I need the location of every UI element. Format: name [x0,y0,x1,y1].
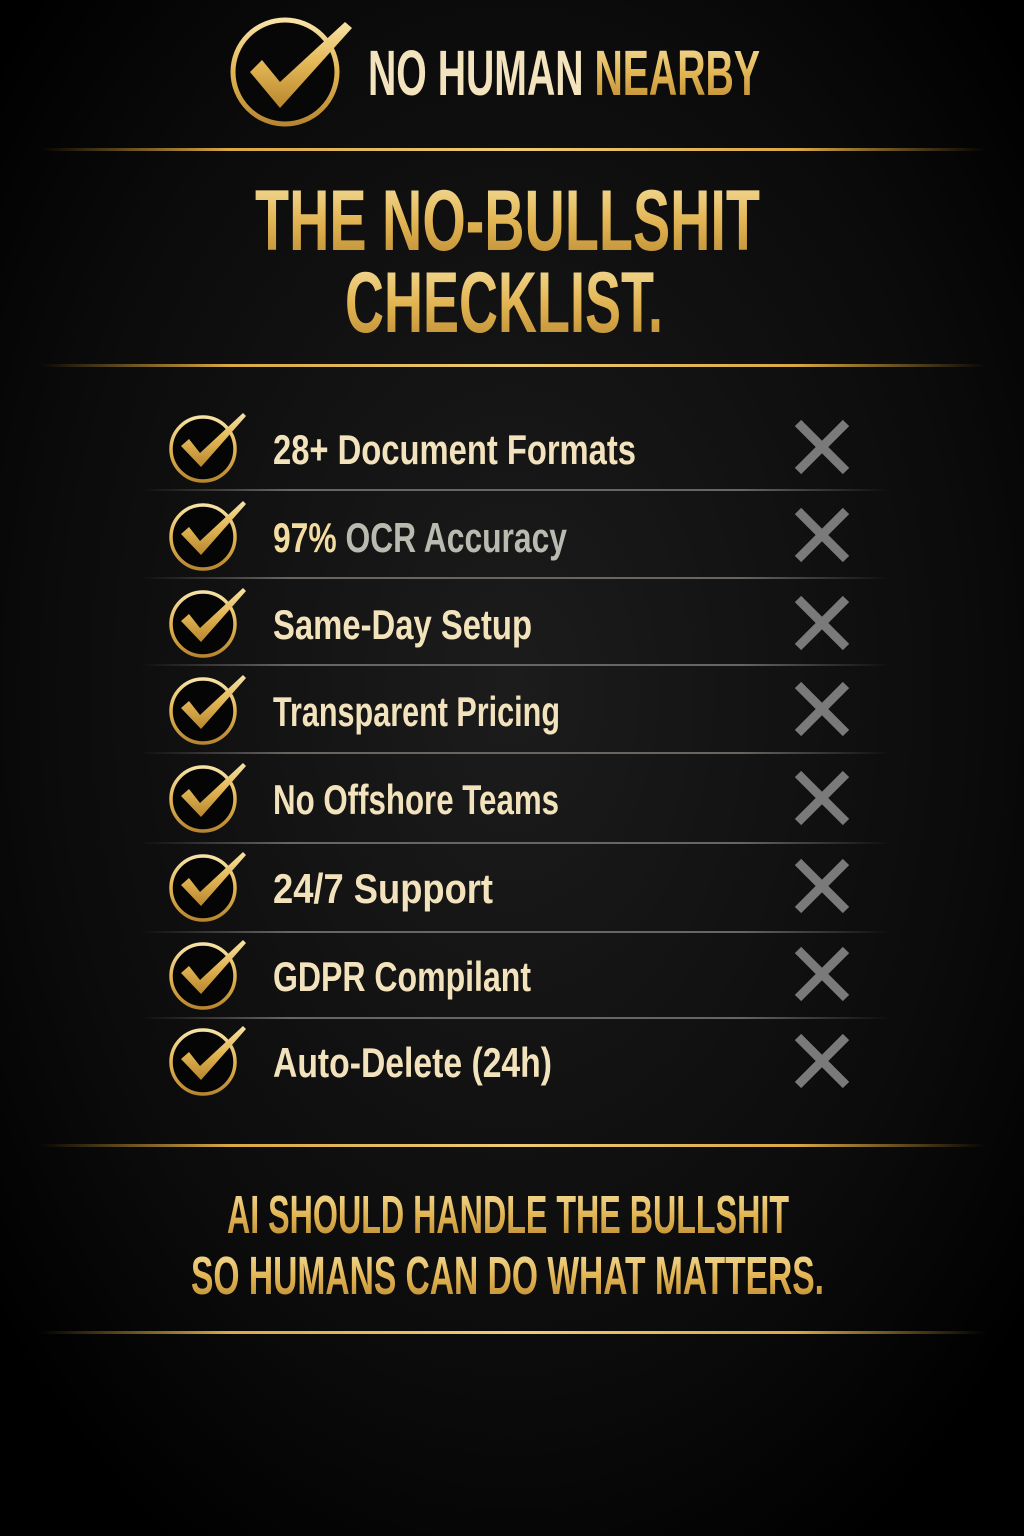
row 3: Same-Day Setup [273,601,532,648]
row 5 [171,763,846,831]
row 2 [171,501,846,569]
row 8: Auto-Delete (24h) [273,1039,552,1086]
row 1 [171,413,846,481]
title: CHECKLIST. [345,255,663,351]
checklist [140,413,890,1094]
row 2: 97% OCR Accuracy [273,514,567,561]
title: THE NO-BULLSHIT [255,173,760,269]
row 3 [171,588,846,656]
row 5: No Offshore Teams [273,776,559,823]
row 4: Transparent Pricing [273,688,560,735]
title [255,173,760,351]
row 6 [171,852,846,920]
row 1: 28+ Document Formats [273,426,636,473]
row 7 [171,940,846,1008]
row 8 [171,1026,846,1094]
row 7: GDPR Compilant [273,953,531,1000]
row 4 [171,675,846,743]
row 6: 24/7 Support [273,865,493,912]
closing statement [191,1185,824,1306]
header logo [233,20,352,124]
header brand name: NO HUMAN NEARBY [368,37,760,109]
